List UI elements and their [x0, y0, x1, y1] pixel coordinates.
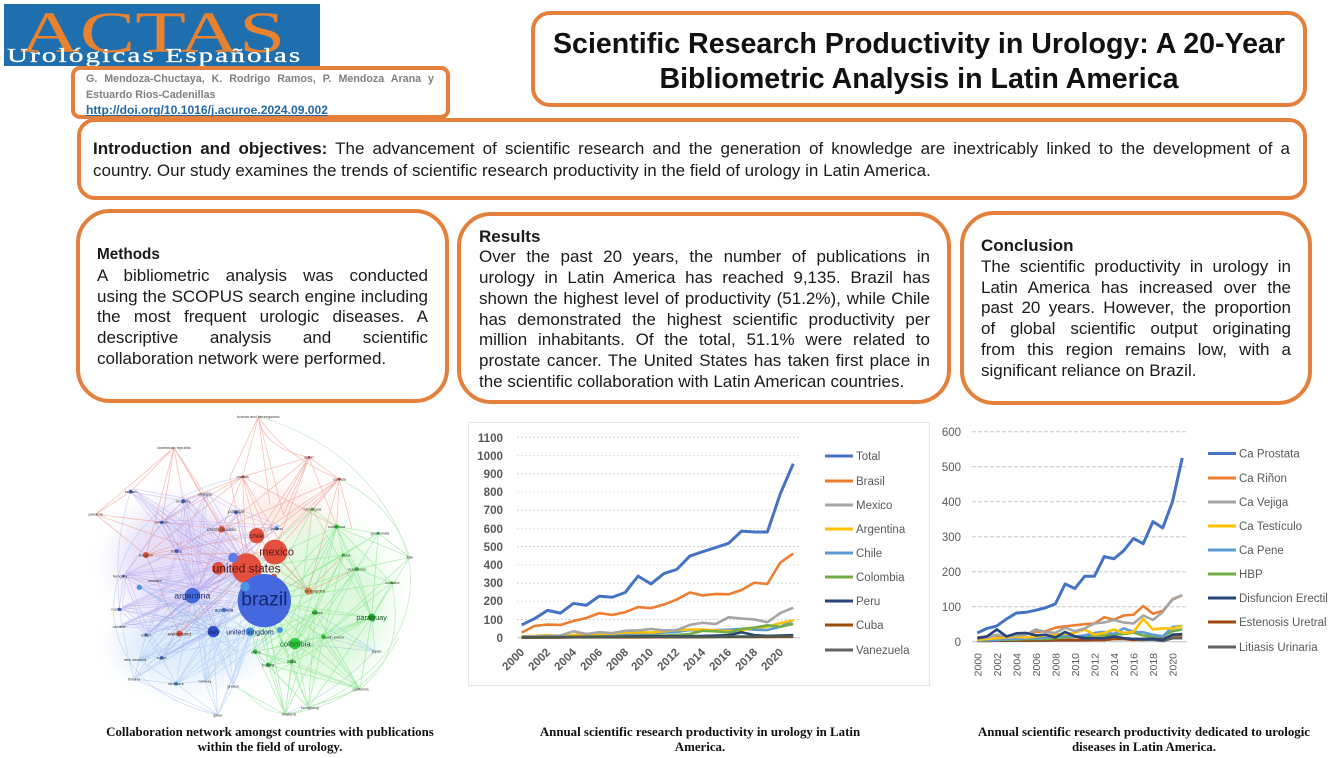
- network labels: uruguay: [176, 498, 191, 503]
- methods text: collaboration network were performed.: [97, 349, 386, 368]
- legend: Total: [856, 451, 880, 463]
- network labels: california: [353, 686, 369, 691]
- network labels: canada: [333, 476, 347, 481]
- panel: results: [457, 212, 951, 404]
- y axis labels: 800: [484, 486, 503, 499]
- x axis labels: 2004: [1012, 653, 1024, 676]
- network labels: portugal: [228, 509, 244, 514]
- x axis labels: 2016: [1128, 653, 1140, 676]
- legend: HBP: [1239, 569, 1263, 581]
- network labels: china: [251, 649, 262, 654]
- network labels: japan: [371, 648, 382, 653]
- network labels: ethiopia: [198, 492, 213, 497]
- network labels: hungary: [113, 573, 127, 578]
- network labels: belgium: [139, 552, 154, 557]
- x axis labels: [972, 653, 1180, 676]
- network labels: spain: [304, 455, 314, 460]
- network labels: colombia: [280, 639, 311, 648]
- introduction text: Introduction and objectives: The advancement of scientific research and the generation of knowledge are inextricably linked to the development of a: [93, 139, 1290, 158]
- methods text: descriptive analysis and scientific: [97, 328, 428, 347]
- methods text: using the SCOPUS search engine including: [97, 286, 428, 306]
- caption: disease chart: Annual scientific research productivity dedicated to urologic: [978, 725, 1310, 739]
- caption: disease chart: diseases in Latin America.: [1072, 740, 1216, 754]
- x axis labels: 2002: [992, 653, 1004, 676]
- author names: http://doi.org/10.1016/j.acuroe.2024.09.002: [86, 103, 328, 117]
- y axis labels: 0: [955, 637, 961, 649]
- network labels: mexico: [259, 547, 294, 559]
- network labels: dominican republic: [157, 445, 191, 450]
- legend: Ca Vejiga: [1239, 497, 1289, 509]
- y axis labels: 400: [484, 559, 503, 572]
- network labels: italy: [208, 629, 221, 636]
- y axis labels: 300: [942, 532, 961, 544]
- y axis labels: [942, 427, 961, 649]
- network labels: sweden: [155, 520, 169, 525]
- author names: G. Mendoza-Chuctaya, K. Rodrigo Ramos, P. Mendoza Arana y: [86, 73, 434, 85]
- x axis labels: 2006: [579, 647, 605, 673]
- x axis labels: 2006: [1031, 653, 1043, 676]
- x axis labels: 2014: [682, 646, 709, 673]
- introduction text: [93, 139, 1290, 180]
- network labels: hongkong: [301, 705, 319, 710]
- results text: [479, 226, 930, 391]
- title text: [553, 28, 1285, 95]
- x axis labels: 2020: [760, 647, 786, 673]
- x axis labels: 2004: [553, 646, 580, 673]
- results text: shown the highest level of productivity (51.2%), while Chile: [479, 289, 930, 308]
- results text: the scientific collaboration with Latin American countries.: [479, 372, 904, 391]
- y axis labels: 300: [484, 577, 503, 590]
- legend: Estenosis Uretral: [1239, 617, 1327, 629]
- legend: Brasil: [856, 476, 885, 488]
- results text: Over the past 20 years, the number of publications in: [479, 247, 930, 266]
- legend: Ca Riñon: [1239, 473, 1287, 485]
- x axis labels: 2000: [501, 647, 527, 673]
- panel: authors and DOI: [71, 66, 450, 119]
- conclusion text: past 20 years. However, the proportion: [981, 298, 1291, 317]
- legend: Colombia: [856, 572, 905, 584]
- methods text: the most frequent urologic diseases. A: [97, 307, 428, 326]
- network labels: bosnia and herzegovina: [237, 414, 280, 419]
- network labels: czech republic: [207, 527, 237, 532]
- network labels: greece: [227, 683, 240, 688]
- network labels: united kingdom: [226, 629, 274, 636]
- x axis labels: 2002: [527, 647, 553, 673]
- network labels: guatemala: [371, 531, 390, 536]
- panel: introduction and objectives: [77, 118, 1307, 200]
- caption: network: Collaboration network amongst countries with publications: [106, 725, 434, 739]
- network labels: turkey: [312, 610, 323, 615]
- y axis labels: 400: [942, 497, 961, 509]
- network labels: panama: [88, 512, 104, 517]
- network labels: iran: [407, 555, 413, 560]
- network labels: argentina: [174, 591, 211, 601]
- caption: network: [106, 725, 434, 754]
- methods text: Methods: [97, 246, 160, 263]
- y axis labels: 1100: [478, 432, 503, 445]
- conclusion text: significant reliance on Brazil.: [981, 360, 1196, 380]
- network labels: finland: [128, 676, 140, 681]
- chart: annual productivity by country: [468, 422, 930, 686]
- network labels: france: [171, 548, 183, 553]
- network labels: venezuela: [348, 566, 367, 571]
- network labels: costa rica: [328, 524, 346, 529]
- legend: Chile: [856, 548, 882, 560]
- network labels: switzerland: [168, 632, 191, 637]
- legend: [1208, 448, 1328, 654]
- network labels: ukraine: [113, 624, 127, 629]
- x axis labels: 2008: [1050, 653, 1062, 676]
- legend: Peru: [856, 596, 880, 608]
- network labels: norway: [199, 678, 211, 683]
- network labels: new zealand: [124, 657, 146, 662]
- network labels: qatar: [213, 712, 223, 717]
- legend: Mexico: [856, 500, 892, 512]
- network labels: [88, 414, 413, 717]
- panel: conclusion: [960, 211, 1312, 405]
- y axis labels: 200: [484, 595, 503, 608]
- y axis labels: 0: [497, 632, 503, 645]
- network labels: egypt: [157, 655, 167, 660]
- y axis labels: 100: [484, 614, 503, 627]
- network labels: singapore: [305, 589, 326, 594]
- line series: [977, 458, 1182, 641]
- title text: Bibliometric Analysis in Latin America: [659, 63, 1179, 95]
- network labels: brazil: [241, 590, 287, 611]
- conclusion text: [981, 236, 1291, 380]
- legend: Litiasis Urinaria: [1239, 642, 1318, 654]
- y axis labels: 900: [484, 468, 503, 481]
- y axis labels: 700: [484, 504, 503, 517]
- logo: Actas Urologicas Espanolas: ACTAS: [20, 1, 285, 65]
- network nodes: [118, 456, 393, 686]
- panel: title: [531, 11, 1307, 107]
- caption: network: within the field of urology.: [198, 740, 342, 754]
- legend: Vanezuela: [856, 645, 910, 657]
- conclusion text: Latin America has increased over the: [981, 278, 1291, 296]
- x axis labels: 2018: [734, 646, 761, 673]
- network labels: bolivia: [262, 662, 275, 667]
- x axis labels: 2010: [1070, 653, 1082, 676]
- caption: productivity chart: America.: [675, 740, 725, 754]
- author names: Estuardo Rios-Cadenillas: [86, 88, 215, 100]
- chart: collaboration network: [88, 414, 413, 718]
- network labels: ecuador: [385, 580, 401, 585]
- legend: [825, 451, 910, 657]
- network labels: cuba: [342, 553, 351, 558]
- legend: Ca Pene: [1239, 545, 1284, 557]
- legend: Ca Prostata: [1239, 448, 1300, 460]
- network labels: india: [287, 659, 297, 664]
- y axis labels: 200: [942, 567, 961, 579]
- x axis labels: [501, 646, 786, 673]
- network labels: poland: [271, 526, 283, 531]
- caption: disease chart: [978, 725, 1310, 754]
- legend: Cuba: [856, 620, 884, 632]
- x axis labels: 2018: [1148, 653, 1160, 676]
- caption: productivity chart: Annual scientific research productivity in urology in Latin: [540, 725, 860, 739]
- results text: has demonstrated the highest scientific productivity per: [479, 310, 930, 328]
- y axis labels: [477, 432, 503, 645]
- network labels: chile: [250, 533, 264, 540]
- y axis labels: 600: [484, 523, 503, 536]
- y axis labels: 600: [942, 427, 961, 439]
- y axis labels: 100: [942, 602, 961, 614]
- network labels: paraguay: [356, 613, 387, 622]
- legend: Disfuncion Erectil: [1239, 593, 1328, 605]
- x axis labels: 2012: [656, 647, 682, 673]
- network labels: sweden: [148, 578, 162, 583]
- results text: prostate cancer. The United States has taken first place in: [479, 351, 930, 370]
- chart: annual productivity by urologic disease: [942, 427, 1328, 676]
- x axis labels: 2020: [1168, 653, 1180, 676]
- network labels: thailand: [282, 712, 296, 717]
- conclusion text: The scientific productivity in urology in: [981, 257, 1291, 276]
- title text: Scientific Research Productivity in Urology: A 20-Year: [553, 28, 1285, 60]
- x axis labels: 2008: [605, 646, 632, 673]
- x axis labels: 2010: [630, 647, 656, 673]
- x axis labels: 2016: [708, 647, 734, 673]
- network labels: denmark: [168, 681, 184, 686]
- methods text: A bibliometric analysis was conducted: [97, 266, 428, 285]
- results text: urology in Latin America has reached 9,135. Brazil has: [479, 268, 930, 287]
- results text: Results: [479, 226, 540, 246]
- conclusion text: Conclusion: [981, 236, 1074, 255]
- x axis labels: 2012: [1090, 653, 1102, 676]
- network labels: australia: [215, 608, 234, 614]
- y axis labels: 1000: [477, 450, 503, 463]
- conclusion text: of global scientific output originating: [981, 319, 1291, 338]
- caption: productivity chart: [540, 725, 860, 754]
- conclusion text: from this region remains low, with a: [981, 340, 1291, 359]
- x axis labels: 2014: [1109, 653, 1121, 676]
- network labels: united states: [213, 562, 281, 576]
- network labels: taiwan: [125, 489, 136, 494]
- y axis labels: 500: [484, 541, 503, 554]
- network labels: nicaragua: [304, 506, 322, 511]
- results text: million inhabitants. Of the total, 51.1% were related to: [479, 330, 930, 349]
- methods text: [97, 246, 428, 368]
- network labels: russia: [111, 607, 123, 612]
- introduction text: country. Our study examines the trends of scientific research productivity in the field of urology in Latin America.: [93, 161, 931, 180]
- legend: Argentina: [856, 524, 906, 536]
- network labels: croatia: [237, 474, 249, 479]
- network labels: south korea: [323, 634, 344, 639]
- network labels: israel: [141, 632, 151, 637]
- y axis labels: 500: [942, 462, 961, 474]
- logo: Actas Urologicas Espanolas: Urológicas Españolas: [7, 45, 302, 67]
- line series: [522, 464, 793, 638]
- legend: Ca Testículo: [1239, 521, 1302, 533]
- x axis labels: 2000: [972, 653, 984, 676]
- panel: methods: [76, 209, 449, 403]
- author names: [86, 73, 434, 117]
